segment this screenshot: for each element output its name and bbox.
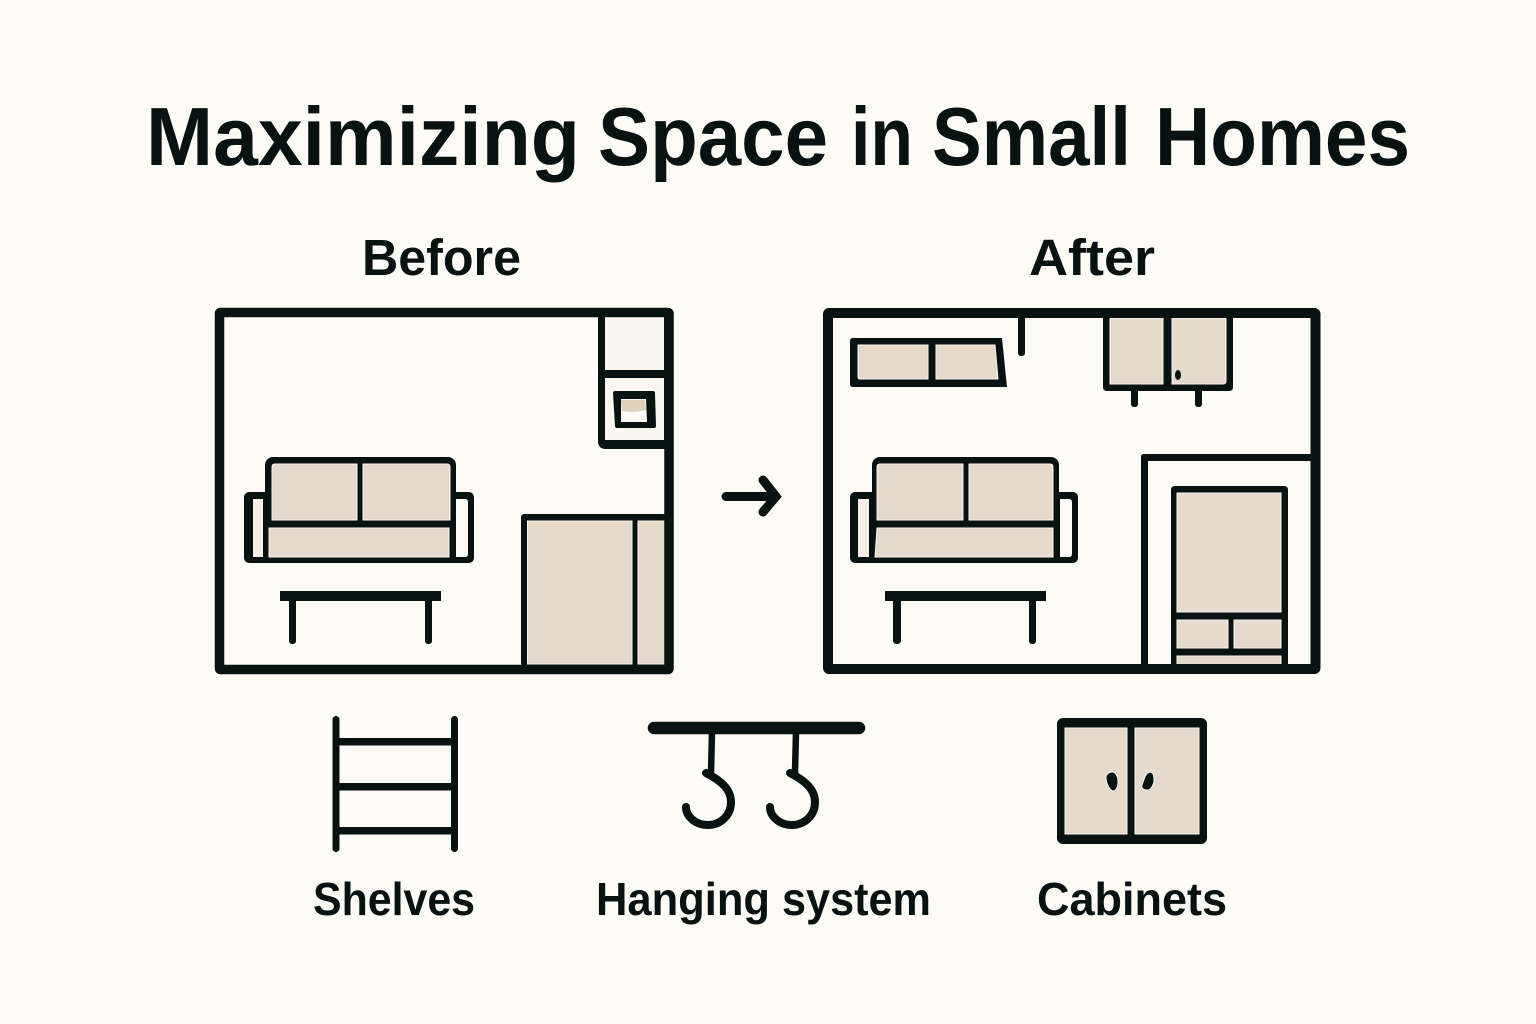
sofa bbox=[850, 457, 1078, 563]
panel: before floor plan bbox=[220, 312, 669, 670]
label: hanging system: system bbox=[782, 873, 931, 925]
label: shelves: Shelves bbox=[313, 873, 475, 925]
wall cabinet bbox=[1103, 316, 1233, 407]
heading: after: After bbox=[1029, 229, 1155, 286]
wardrobe with drawers bbox=[1171, 486, 1288, 666]
title: Space bbox=[598, 90, 828, 183]
heading: before: Before bbox=[362, 229, 521, 286]
room outline bbox=[828, 313, 1316, 669]
wardrobe block bbox=[521, 514, 666, 666]
icon: hanging system bbox=[654, 728, 859, 825]
title: in bbox=[851, 90, 913, 183]
coffee table bbox=[885, 591, 1046, 644]
title: Maximizing bbox=[146, 90, 580, 183]
label: hanging system: Hanging bbox=[596, 873, 770, 925]
room outline bbox=[220, 312, 669, 670]
icon: cabinets bbox=[1057, 718, 1207, 844]
title: Small bbox=[932, 90, 1131, 183]
wall stub bbox=[1018, 316, 1025, 356]
label: cabinets: Cabinets bbox=[1037, 873, 1227, 925]
sofa bbox=[244, 457, 474, 563]
icon: shelves bbox=[332, 716, 458, 852]
closet alcove bbox=[1141, 454, 1313, 666]
arrow bbox=[726, 480, 776, 512]
kitchen unit with microwave bbox=[598, 315, 666, 449]
title: Homes bbox=[1155, 90, 1410, 183]
panel: after floor plan bbox=[828, 313, 1316, 669]
coffee table bbox=[280, 591, 441, 644]
wall shelf unit bbox=[850, 338, 1007, 387]
